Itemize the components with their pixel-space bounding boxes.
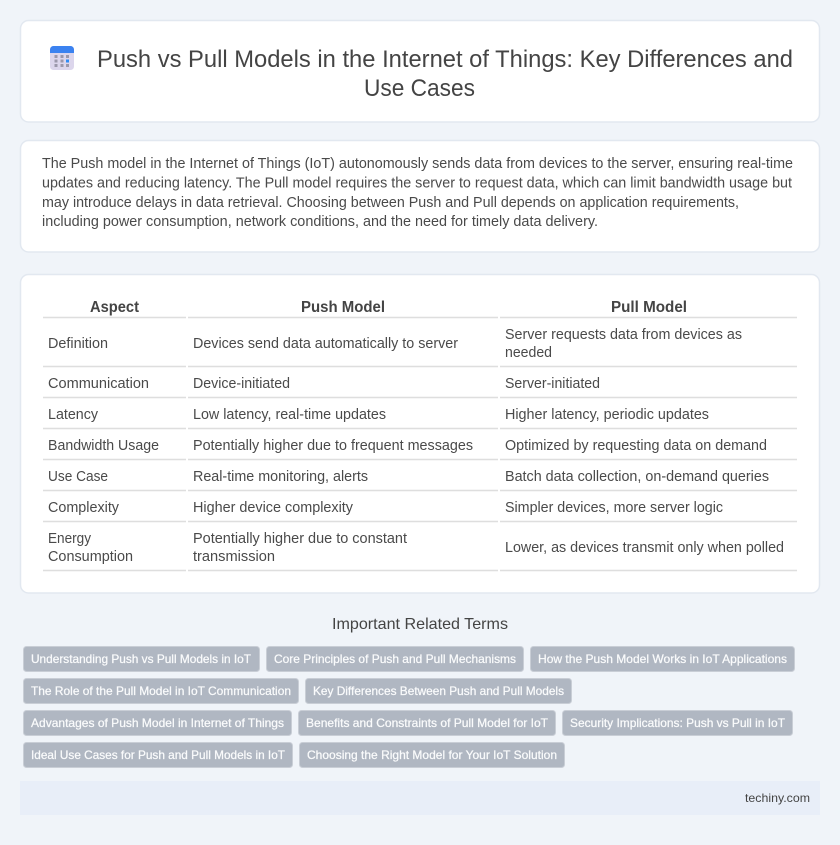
title [97, 46, 793, 102]
row: energy consumption: Energy [48, 531, 92, 547]
table header row: Push Model [301, 299, 385, 316]
heading: important related terms: Important Related Terms [332, 616, 508, 633]
table header row: Pull Model [611, 299, 687, 316]
row: communication: Server-initiated [505, 376, 600, 392]
text block: summary: including power consumption, network conditions, and the need for timely data delivery. [42, 214, 598, 230]
row: bandwidth usage: Bandwidth Usage [48, 438, 159, 454]
icon: calendar [50, 46, 74, 70]
tag: Core Principles of Push and Pull Mechanisms [274, 652, 516, 666]
row: use case: Real-time monitoring, alerts [193, 469, 368, 485]
text block: summary: may introduce delays in data retrieval. Choosing between Push and Pull depends on application requirements, [42, 195, 739, 211]
tag [300, 742, 564, 768]
row: use case [43, 469, 797, 490]
row: definition: Definition [48, 336, 108, 352]
tag: Choosing the Right Model for Your IoT Solution [307, 748, 557, 762]
row: energy consumption: Potentially higher due to constant [193, 531, 407, 547]
tag: Understanding Push vs Pull Models in IoT [31, 652, 252, 666]
row: bandwidth usage [43, 438, 797, 460]
title: Use Cases [364, 75, 475, 102]
row: complexity: Complexity [48, 500, 120, 516]
row: use case: Use Case [48, 469, 108, 485]
tag [24, 710, 292, 736]
row: energy consumption [43, 531, 797, 570]
text block: summary [42, 156, 793, 230]
tag [24, 678, 298, 704]
row: communication: Communication [48, 376, 149, 392]
row: definition: Server requests data from devices as [505, 327, 742, 343]
row: energy consumption: Lower, as devices transmit only when polled [505, 540, 784, 556]
panel: related term tags [24, 646, 794, 768]
panel: intro paragraph [20, 140, 820, 252]
row: latency [43, 407, 797, 428]
row: complexity [43, 500, 797, 522]
panel: title header [20, 20, 820, 122]
row: latency: Latency [48, 407, 99, 423]
tag [530, 646, 794, 672]
footer bar [20, 781, 820, 815]
tag: Security Implications: Push vs Pull in IoT [570, 716, 786, 730]
text block: summary: The Push model in the Internet of Things (IoT) autonomously sends data from devices to the server, ensuring real-time [42, 156, 793, 172]
tag [24, 742, 292, 768]
title: Push vs Pull Models in the Internet of Things: Key Differences and [97, 46, 793, 73]
row: definition [43, 327, 797, 366]
tag: The Role of the Pull Model in IoT Communication [31, 684, 291, 698]
row: energy consumption: transmission [193, 549, 275, 565]
tag [306, 678, 572, 704]
tag: Advantages of Push Model in Internet of Things [31, 716, 284, 730]
row: latency: Higher latency, periodic updates [505, 407, 709, 423]
text block: summary: updates and reducing latency. The Pull model requires the server to request data, which can limit bandwidth usage but [42, 176, 792, 192]
tag: Key Differences Between Push and Pull Models [313, 684, 564, 698]
footer source text: techiny.com [745, 791, 810, 805]
tag: Ideal Use Cases for Push and Pull Models in IoT [31, 748, 286, 762]
row: communication: Device-initiated [193, 376, 290, 392]
tag [298, 710, 556, 736]
row: bandwidth usage: Potentially higher due to frequent messages [193, 438, 473, 454]
tag: Benefits and Constraints of Pull Model for IoT [306, 716, 549, 730]
row: bandwidth usage: Optimized by requesting data on demand [505, 438, 767, 454]
table header row: Aspect [90, 299, 140, 316]
row: definition: Devices send data automatically to server [193, 336, 458, 352]
table header row [43, 299, 797, 318]
panel: comparison table [20, 274, 820, 593]
tag: How the Push Model Works in IoT Applications [538, 652, 787, 666]
row: energy consumption: Consumption [48, 549, 133, 565]
row: complexity: Higher device complexity [193, 500, 354, 516]
tag [562, 710, 792, 736]
row: use case: Batch data collection, on-demand queries [505, 469, 769, 485]
tag [24, 646, 260, 672]
row: communication [43, 376, 797, 398]
row: complexity: Simpler devices, more server logic [505, 500, 723, 516]
row: latency: Low latency, real-time updates [193, 407, 386, 423]
tag [266, 646, 524, 672]
row: definition: needed [505, 345, 552, 361]
